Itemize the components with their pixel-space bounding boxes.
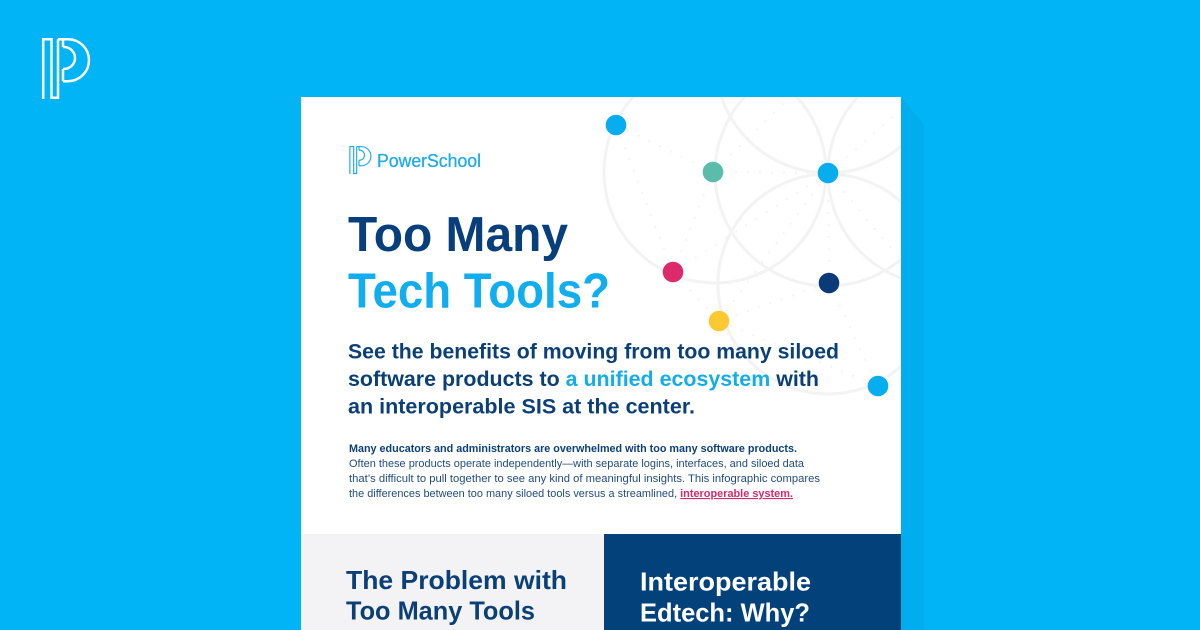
title xyxy=(348,207,610,318)
dot: yellow xyxy=(709,311,729,331)
subtitle xyxy=(348,340,839,418)
intro text: Many educators and administrators are overwhelmed with too many software products. xyxy=(349,443,797,455)
subtitle: software products to a unified ecosystem with xyxy=(348,368,819,391)
dot: navy xyxy=(819,273,839,293)
intro text xyxy=(349,443,821,500)
heading: interoperable: Interoperable xyxy=(640,566,811,596)
heading: problem xyxy=(346,565,567,626)
network graphic xyxy=(602,97,901,396)
wordmark: PowerSchool xyxy=(377,151,481,171)
heading: problem: Too Many Tools xyxy=(346,596,535,626)
card shadow xyxy=(901,97,924,630)
subtitle: an interoperable SIS at the center. xyxy=(348,395,695,418)
icon: PowerSchool logo white xyxy=(43,39,89,99)
panel: interoperable edtech xyxy=(604,534,901,630)
heading: interoperable xyxy=(640,566,811,628)
subtitle: See the benefits of moving from too many siloed xyxy=(348,340,839,363)
title: Tech Tools? xyxy=(348,264,610,318)
intro text: Often these products operate independently—with separate logins, interfaces, and siloed data xyxy=(349,458,805,470)
dot: blue bottom xyxy=(868,376,888,396)
panel: white card xyxy=(301,97,901,534)
dot: blue top xyxy=(606,115,626,135)
title: Too Many xyxy=(348,207,568,262)
logo: PowerSchool xyxy=(350,147,481,174)
heading: problem: The Problem with xyxy=(346,565,567,595)
dot: blue centre xyxy=(818,163,838,183)
intro text: that’s difficult to pull together to see any kind of meaningful insights. This infographic compares xyxy=(349,473,821,485)
icon: small logo xyxy=(350,147,371,174)
intro text: the differences between too many siloed tools versus a streamlined, interoperable system. xyxy=(349,488,793,500)
dot: pink xyxy=(663,262,683,282)
heading: interoperable: Edtech: Why? xyxy=(640,598,810,628)
dot: teal xyxy=(703,162,723,182)
panel: the problem xyxy=(301,534,604,630)
